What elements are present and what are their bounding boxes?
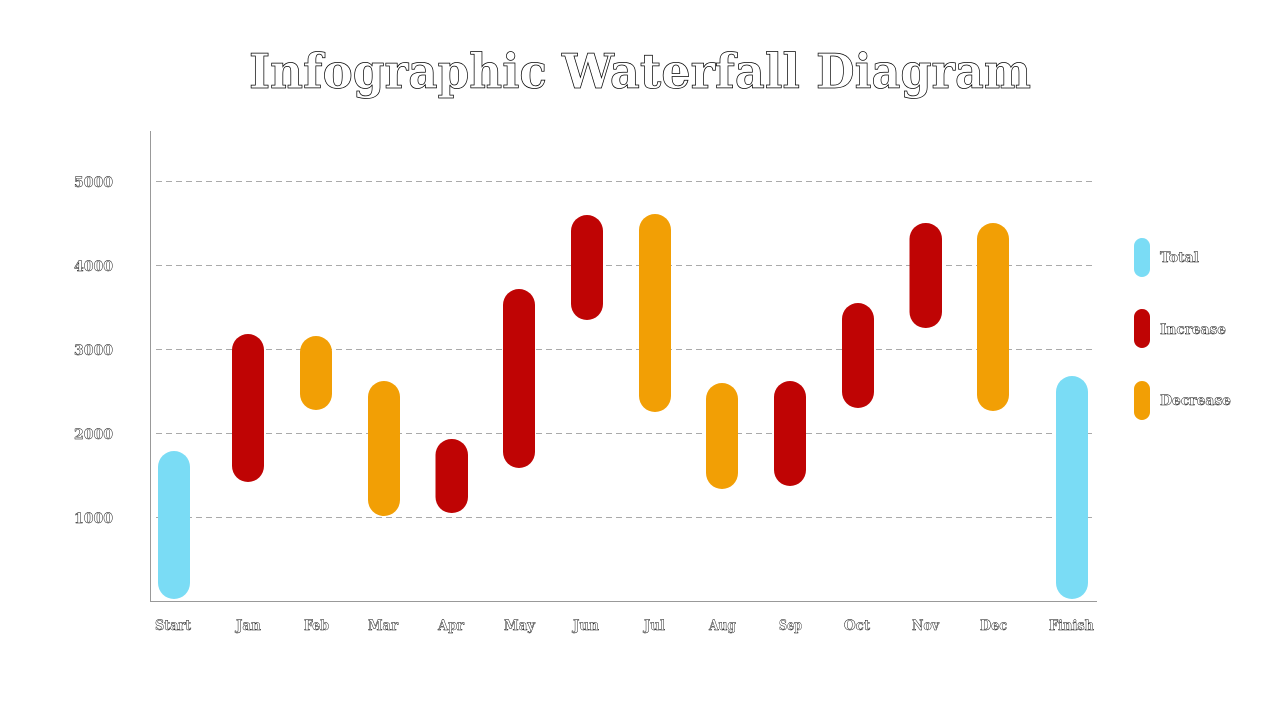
y axis labels: 3000	[74, 343, 113, 359]
chart axes	[150, 131, 1097, 602]
x axis labels: Dec	[980, 618, 1007, 634]
x axis labels: Apr	[437, 618, 465, 634]
bar: May increase	[503, 289, 535, 468]
bar: Jun increase	[571, 215, 603, 320]
bar: Jan increase	[232, 334, 264, 482]
bar: Jul decrease	[639, 214, 671, 412]
bar: Aug decrease	[706, 383, 738, 489]
bar: Apr increase	[436, 439, 468, 513]
y axis labels	[74, 175, 113, 527]
x axis labels: Oct	[844, 618, 871, 634]
legend: increase	[1134, 309, 1226, 348]
title	[249, 44, 1031, 100]
y axis labels: 4000	[74, 259, 113, 275]
x axis labels	[155, 618, 1094, 634]
y axis labels: 1000	[74, 511, 113, 527]
bar: Oct increase	[842, 303, 874, 408]
legend: total	[1134, 238, 1199, 277]
y axis labels: 5000	[74, 175, 113, 191]
x axis labels: Nov	[912, 618, 940, 634]
y axis labels: 2000	[74, 427, 113, 443]
bar: Feb decrease	[300, 336, 332, 410]
x axis labels: Aug	[708, 618, 736, 634]
x axis labels: Feb	[304, 618, 329, 634]
title: Waterfall	[561, 44, 800, 100]
bar: Finish total	[1056, 376, 1088, 599]
x axis labels: Jun	[571, 618, 599, 634]
waterfall bars	[158, 214, 1088, 599]
x axis labels: Finish	[1049, 618, 1094, 634]
x axis labels: Jul	[642, 618, 665, 634]
bar: Dec decrease	[977, 223, 1009, 411]
bar: Mar decrease	[368, 381, 400, 516]
x axis labels: Sep	[779, 618, 802, 634]
x axis labels: May	[504, 618, 536, 634]
legend: total: Total	[1160, 250, 1199, 266]
legend: increase: Increase	[1160, 322, 1226, 338]
x axis labels: Start	[155, 618, 191, 634]
legend: decrease	[1134, 381, 1231, 420]
bar: Start total	[158, 451, 190, 599]
legend	[1134, 238, 1231, 420]
bar: Nov increase	[910, 223, 942, 328]
bar: Sep increase	[774, 381, 806, 486]
x axis labels: Mar	[368, 618, 399, 634]
legend: decrease: Decrease	[1160, 393, 1231, 409]
x axis labels: Jan	[234, 618, 261, 634]
title: Infographic	[249, 44, 547, 100]
title: Diagram	[816, 44, 1031, 100]
